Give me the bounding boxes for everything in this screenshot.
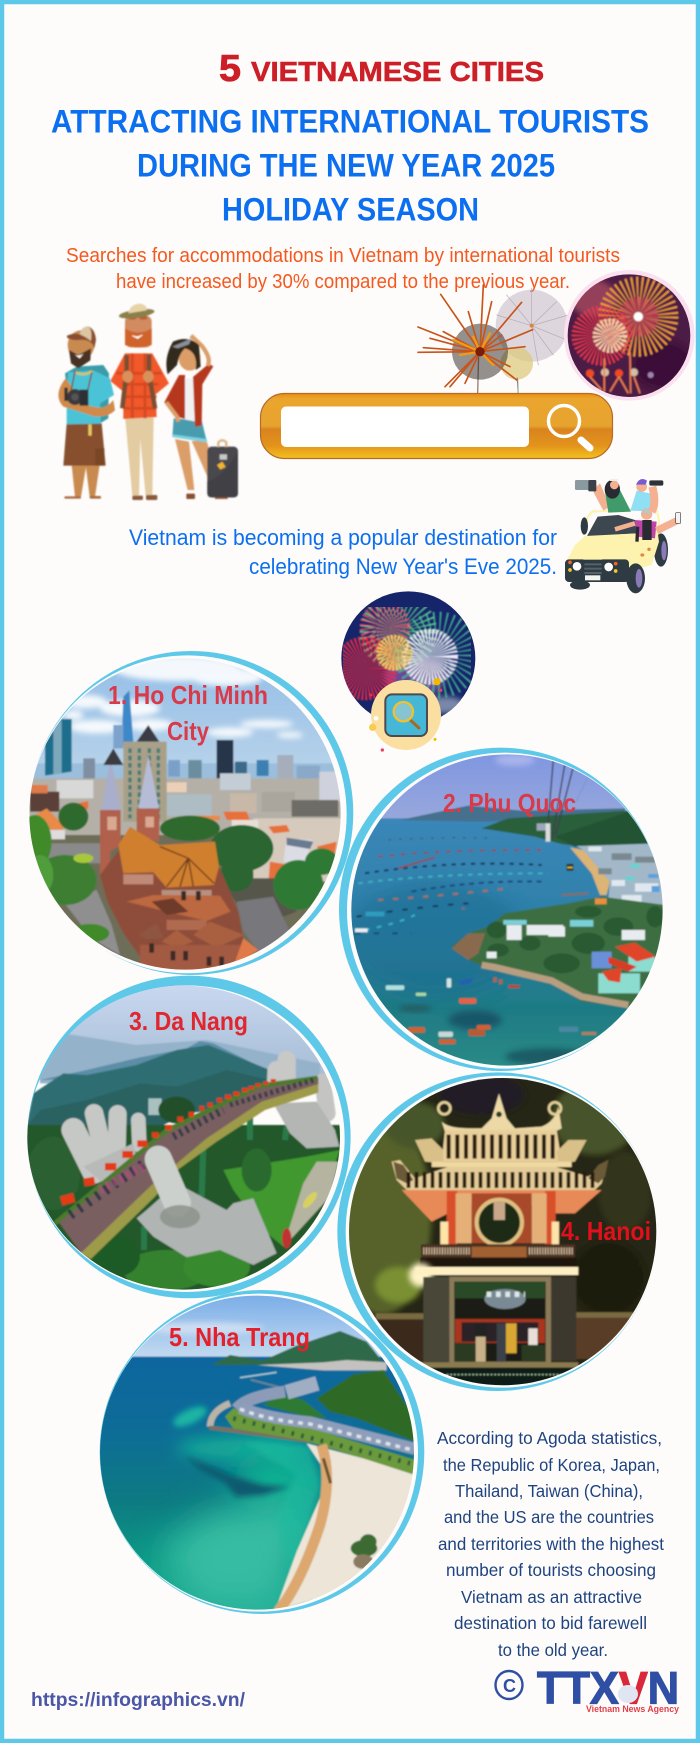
label: 3. Da Nang: 3. Da Nang [129, 1006, 248, 1036]
label: 2. Phu Quoc: 2. Phu Quoc [443, 788, 576, 818]
city 1: Ho Chi Minh City [18, 645, 360, 985]
ring and photo: Nha Trang coast and beach [90, 1285, 430, 1617]
logo: TTXVN Vietnam News Agency: TTXVN [537, 1662, 679, 1714]
photo: fireworks circle top right [564, 270, 695, 401]
label: 4. Hanoi: 4. Hanoi [561, 1216, 651, 1246]
logo: TTXVN Vietnam News Agency: Vietnam News Agency [586, 1704, 680, 1715]
city 5: Nha Trang [90, 1285, 430, 1617]
search bar [260, 394, 612, 458]
heading: attracting international tourists: HOLIDAY SEASON [222, 192, 479, 228]
label: 1. Ho Chi Minh City: 1. Ho Chi Minh [108, 680, 268, 710]
text: Agoda statistics: According to Agoda statistics, [437, 1428, 662, 1448]
illustration: three tourists with suitcase [58, 304, 238, 500]
city 3: Da Nang [20, 970, 360, 1298]
city 4: Hanoi [337, 1072, 656, 1391]
text: Agoda statistics: the Republic of Korea, Japan, [443, 1455, 660, 1475]
text: searches increased by 30%: have increased by 30% compared to the previous year. [116, 271, 570, 293]
label: 5. Nha Trang: 5. Nha Trang [169, 1322, 310, 1352]
text: popular destination [129, 525, 557, 579]
text: Agoda statistics: to the old year. [498, 1640, 608, 1660]
text: Agoda statistics: Thailand, Taiwan (China), [455, 1481, 643, 1501]
label: 1. Ho Chi Minh City: City [167, 716, 209, 746]
icon: magnifier badge [369, 678, 442, 752]
ring and photo: Phu Quoc bay with boats [335, 740, 675, 1072]
title: 5 Vietnamese cities [219, 48, 544, 89]
text: Agoda statistics: and territories with the highest [438, 1534, 664, 1554]
text: popular destination: celebrating New Year's Eve 2025. [249, 554, 557, 579]
ring and photo: Golden Bridge held by stone hands [20, 970, 360, 1298]
photo: fireworks circle middle [341, 591, 475, 752]
text: Agoda statistics [437, 1428, 664, 1660]
city 2: Phu Quoc [335, 740, 675, 1072]
text: Agoda statistics: and the US are the countries [444, 1507, 654, 1527]
search input field [281, 406, 529, 447]
text: searches increased by 30% [66, 245, 620, 293]
illustration: firework burst [418, 285, 568, 393]
text: popular destination: Vietnam is becoming a popular destination for [129, 525, 557, 550]
title: 5 Vietnamese cities: VIETNAMESE CITIES [251, 56, 544, 87]
text: searches increased by 30%: Searches for accommodations in Vietnam by international tourists [66, 245, 620, 267]
heading: attracting international tourists: ATTRACTING INTERNATIONAL TOURISTS [51, 104, 649, 140]
ring and photo: Ho Chi Minh City skyline and cathedral [18, 645, 360, 985]
text: Agoda statistics: destination to bid farewell [454, 1613, 647, 1633]
illustration: tourists in a jeep [565, 479, 681, 593]
magnifier icon [548, 406, 590, 448]
source url: https://infographics.vn/ [31, 1689, 246, 1711]
heading: attracting international tourists: DURING THE NEW YEAR 2025 [137, 148, 555, 184]
heading: attracting international tourists [51, 104, 649, 228]
title: 5 Vietnamese cities: 5 [219, 48, 241, 89]
label: 1. Ho Chi Minh City [108, 680, 268, 746]
text: Agoda statistics: Vietnam as an attractive [461, 1587, 642, 1607]
ring and photo: Temple of Literature gate at night [337, 1072, 656, 1391]
logo: TTXVN Vietnam News Agency: C [503, 1676, 516, 1696]
text: Agoda statistics: number of tourists choosing [446, 1560, 656, 1580]
